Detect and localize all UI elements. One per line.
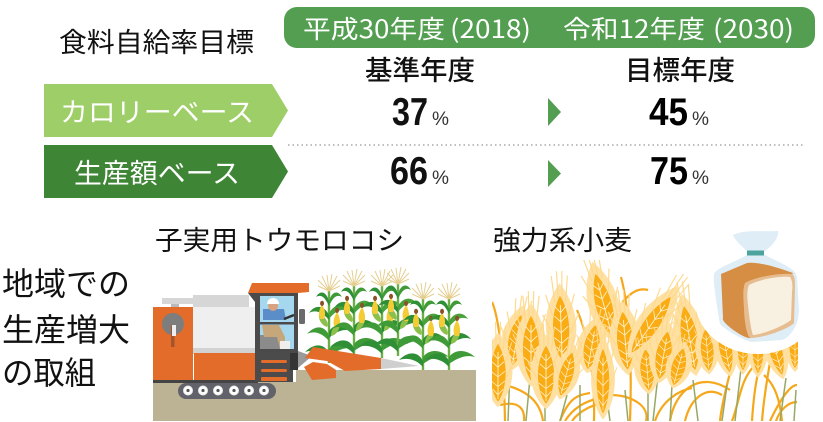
corn header <box>298 347 419 380</box>
wheat stalks <box>492 277 797 421</box>
cab <box>248 283 309 353</box>
icon: bread in plastic bag <box>714 231 799 342</box>
halo behind bread bag <box>695 246 823 422</box>
illustration: corn harvester <box>153 267 476 421</box>
section label: regional initiatives: 生産増大 <box>2 305 130 351</box>
value: calorie target 45%: 45 <box>649 91 688 134</box>
arrow: production <box>548 160 561 187</box>
header pill: fiscal years: 平成30年度 <box>303 10 445 46</box>
heading: food self-sufficiency target: 食料自給率目標 <box>59 21 254 60</box>
arrow: calorie <box>548 98 561 126</box>
header pill: fiscal years <box>284 7 815 48</box>
row label: calorie basis <box>44 84 288 137</box>
header pill: fiscal years: (2018) <box>450 10 531 46</box>
wheat ears <box>492 260 798 420</box>
value: calorie target 45%: % <box>692 109 709 130</box>
row label: production value basis <box>44 145 288 198</box>
caption: grain corn: 子実用トウモロコシ <box>155 219 404 258</box>
header pill: fiscal years: 令和12年度 <box>563 10 705 46</box>
row label: production value basis: 生産額ベース <box>74 152 240 191</box>
illustration: wheat field <box>492 260 798 421</box>
row label: calorie basis: カロリーベース <box>60 91 254 130</box>
ground <box>153 370 476 421</box>
column heading: target year: 目標年度 <box>625 49 735 88</box>
engine panel <box>255 353 298 382</box>
section label: regional initiatives: 地域での <box>2 259 130 305</box>
column heading: base year: 基準年度 <box>365 49 475 88</box>
value: calorie base 37%: % <box>432 109 449 130</box>
dotted divider <box>288 144 803 146</box>
value: calorie base 37%: 37 <box>392 91 428 134</box>
header pill: fiscal years: (2030) <box>713 10 794 46</box>
value: production target 75%: % <box>692 168 709 189</box>
section label: regional initiatives <box>2 259 130 394</box>
combine body <box>153 295 258 383</box>
value: production base 66%: 66 <box>390 150 428 193</box>
corn plants <box>305 267 475 371</box>
crawler track <box>178 383 276 399</box>
value: production target 75%: 75 <box>650 150 688 193</box>
caption: hard wheat: 強力系小麦 <box>493 219 632 258</box>
value: production base 66%: % <box>432 168 449 189</box>
section label: regional initiatives: の取組 <box>2 348 96 394</box>
